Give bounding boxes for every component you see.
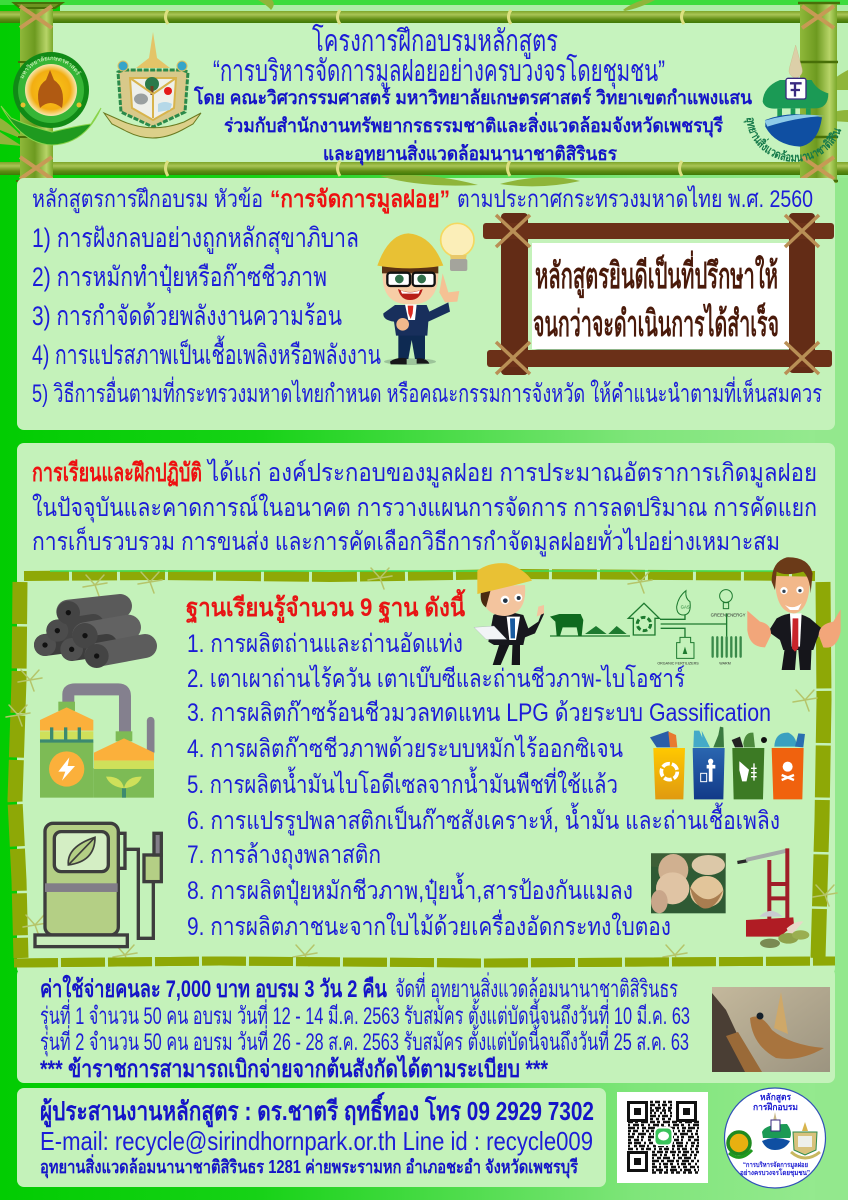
text: topic list: 4) การแปรสภาพเป็นเชื้อเพลิงหรือพลังงาน: [32, 335, 381, 370]
text: topics intro: หลักสูตรการฝึกอบรม หัวข้อ: [32, 186, 263, 214]
bamboo: header top beam: [0, 10, 848, 24]
text: practice description: [32, 458, 817, 557]
icon: biofuel pump: [35, 823, 161, 947]
icon: biogas process diagram: [550, 590, 746, 666]
icon: wooden sign frame: [483, 213, 834, 375]
heading: project title: และอุทยานสิ่งแวดล้อมนานาชาติสิรินธร: [323, 140, 618, 166]
header leaves: [0, 0, 848, 146]
text: email and line id: E-mail: recycle@sirindhornpark.or.th Line id : recycle009: [40, 1126, 593, 1156]
heading: nine learning stations: ฐานเรียนรู้จำนวน 9 ฐาน ดังนี้: [186, 588, 466, 624]
badge: course logos: การฝึกอบรม: [753, 1102, 798, 1112]
heading: project title: ร่วมกับสำนักงานทรัพยากรธรรมชาติและสิ่งแวดล้อมจังหวัดเพชรบุรี: [224, 112, 724, 138]
text: cost: ค่าใช้จ่ายคนละ 7,000 บาท อบรม 3 วัน 2 คืน: [40, 974, 387, 1003]
panel: contact coordinator: [17, 1088, 606, 1187]
list: nine learning stations: 8. การผลิตปุ๋ยหมักชีวภาพ,ปุ๋ยน้ำ,สารป้องกันแมลง: [187, 872, 633, 906]
icon: biogas process diagram: WARM: [719, 662, 731, 666]
bamboo: header right post: [798, 3, 840, 183]
text: topic list: 2) การหมักทำปุ๋ยหรือก๊าซชีวภาพ: [32, 262, 327, 294]
text: topics intro: [32, 185, 813, 214]
badge: course logos: “การบริหารจัดการมูลฝอย: [743, 1161, 808, 1170]
bamboo: header bottom beam: [0, 161, 848, 176]
list: nine learning stations: 7. การล้างถุงพลาสติก: [187, 841, 381, 870]
photo: mudskipper fish: [712, 987, 830, 1072]
icon: biogas process diagram: ORGANIC FERTILIZERS: [657, 662, 699, 666]
photo: leaf bowls: [651, 853, 726, 913]
badge logo: university: [728, 1132, 752, 1157]
panel: learning and practice: [17, 443, 835, 975]
badge logo: crest: [791, 1122, 820, 1158]
heading: project title: โครงการฝึกอบรมหลักสูตร: [312, 23, 558, 59]
text: topics intro: “การจัดการมูลฝอย”: [270, 186, 450, 214]
panel: cost and schedule: [14, 961, 835, 1083]
list: nine learning stations: 4. การผลิตก๊าซชีวภาพด้วยระบบหมักไร้ออกซิเจน: [187, 734, 623, 763]
bamboo border: learning stations: [6, 568, 837, 966]
panel: header: [0, 0, 848, 183]
icon: businessman thumbs up: [747, 557, 841, 670]
list: nine learning stations: [187, 630, 780, 941]
text: cost: [40, 972, 690, 1083]
text: coordinator: ผู้ประสานงานหลักสูตร : ดร.ชาตรี ฤทธิ์ทอง โทร 09 2929 7302: [40, 1091, 594, 1128]
logo: Kasetsart University seal: มหาวิทยาลัยเกษตรศาสตร์: [20, 56, 82, 78]
icon: leaf press machine: [737, 848, 809, 948]
icon: biogas factory: [40, 689, 154, 798]
QR code: [617, 1092, 708, 1183]
logo: Sirindhorn park: [744, 45, 842, 162]
text: cost: *** ข้าราชการสามารถเบิกจ่ายจากต้นสังกัดได้ตามระเบียบ ***: [40, 1054, 549, 1083]
icon: charcoal briquettes: [34, 601, 145, 668]
icon: biogas process diagram: GREEN ENERGY: [711, 613, 746, 618]
badge: course logos: หลักสูตร: [760, 1092, 791, 1103]
text: topic list: 1) การฝังกลบอย่างถูกหลักสุขาภิบาล: [32, 223, 359, 255]
icon: biogas process diagram: GAS: [681, 604, 690, 609]
bamboo bottom edge overlay: [14, 961, 835, 963]
heading: project title: [193, 23, 752, 166]
logo: Kasetsart University seal: [0, 52, 102, 146]
icon: engineer with light bulb: [377, 223, 474, 365]
text: address: อุทยานสิ่งแวดล้อมนานาชาติสิรินธร 1281 ค่ายพระรามหก อำเภอชะอำ จังหวัดเพชรบุรี: [40, 1154, 578, 1179]
icon: engineer with laptop: [474, 563, 544, 665]
list: nine learning stations: 5. การผลิตน้ำมันไบโอดีเซลจากน้ำมันพืชที่ใช้แล้ว: [187, 766, 618, 799]
badge: course logos: อย่างครบวงจรโดยชุมชน”: [740, 1168, 810, 1177]
list: nine learning stations: 1. การผลิตถ่านและถ่านอัดแท่ง: [187, 630, 463, 658]
bamboo: header left post: [14, 3, 62, 183]
icon: LINE logo: [654, 1127, 673, 1146]
bamboo leaf under header: [380, 175, 580, 186]
badge: course logos: [724, 1088, 826, 1188]
list: nine learning stations: 9. การผลิตภาชนะจากใบไม้ด้วยเครื่องอัดกระทงใบตอง: [187, 909, 671, 941]
logo: Sirindhorn park: อุทยานสิ่งแวดล้อมนานาชาติสิรินธร: [744, 117, 842, 162]
text: sign message: [533, 250, 779, 344]
list: nine learning stations: 2. เตาเผาถ่านไร้ควัน เตาเบ๊บซีและถ่านชีวภาพ-ไบโอชาร์: [187, 664, 685, 693]
text: cost: จัดที่ อุทยานสิ่งแวดล้อมนานาชาติสิรินธร: [395, 972, 678, 1004]
icon: recycling bins: [650, 727, 805, 799]
text: topic list: [32, 223, 822, 408]
heading: project title: โดย คณะวิศวกรรมศาสตร์ มหาวิทยาลัยเกษตรศาสตร์ วิทยาเขตกำแพงแสน: [193, 86, 752, 109]
panel: waste management topics: [17, 175, 835, 430]
text: topic list: 3) การกำจัดด้วยพลังงานความร้อน: [32, 301, 342, 331]
badge logo: park: [762, 1112, 791, 1150]
text: practice description: การเรียนและฝึกปฏิบัติ: [32, 459, 202, 487]
logo: provincial crest: [104, 32, 201, 138]
